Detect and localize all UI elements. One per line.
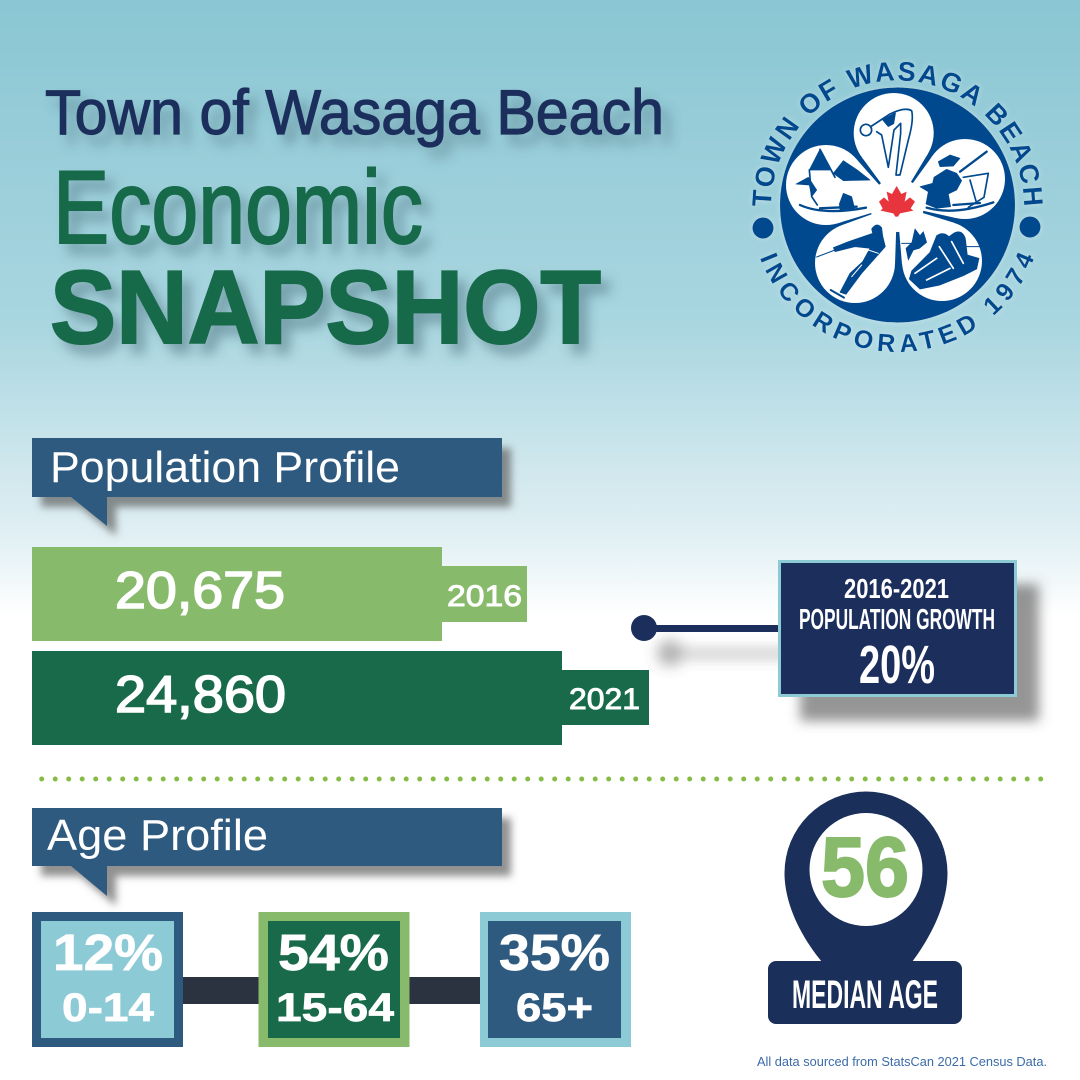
title <box>45 78 664 366</box>
value 2016: 20,675 <box>115 562 285 620</box>
median age plate <box>768 961 962 1024</box>
seal disc <box>780 88 1015 322</box>
header banner <box>32 438 502 526</box>
label 0-14: 0-14 <box>62 986 155 1030</box>
label 15-64: 15-64 <box>276 986 395 1030</box>
maple leaf <box>879 186 915 217</box>
value 2021: 24,860 <box>115 666 286 724</box>
white petals <box>786 93 1005 303</box>
header banner <box>32 808 502 896</box>
median age value: 56 <box>821 820 909 914</box>
12 percent: 12% <box>53 924 163 981</box>
illustration: windsurfer <box>796 149 870 210</box>
header text: Population Profile <box>50 443 400 492</box>
illustrations lower petals <box>800 202 993 298</box>
connector: bar to growth callout <box>631 615 780 641</box>
label 65+: 65+ <box>516 986 593 1030</box>
35 percent: 35% <box>499 924 610 981</box>
seal text bottom: INCORPORATED 1974 <box>760 252 1034 352</box>
panel: population profile header <box>32 438 502 526</box>
illustration: voyageur <box>920 152 988 208</box>
illustration: water skier <box>817 225 885 298</box>
bar: 2016 population <box>32 547 527 641</box>
callout value: 20% <box>859 635 935 695</box>
callout years: 2016-2021 <box>844 573 949 604</box>
age connectors <box>183 977 481 1004</box>
icon: median age pin <box>768 792 962 1024</box>
54 percent: 54% <box>278 924 389 981</box>
callout box <box>780 562 1016 696</box>
bar: 2021 population <box>32 651 649 745</box>
year 2021: 2021 <box>569 683 640 716</box>
bar body 2016 <box>32 547 442 641</box>
pin hole <box>810 813 922 926</box>
title line: SNAPSHOT: SNAPSHOT <box>50 250 601 366</box>
title line: town name: Town of Wasaga Beach <box>45 78 664 148</box>
title line: Economic: Economic <box>53 150 423 266</box>
pin body <box>784 792 948 962</box>
footnote source: All data sourced from StatsCan 2021 Census Data. <box>757 1054 1047 1069</box>
bar tab 2016 <box>440 566 527 622</box>
bar tab 2021 <box>560 670 649 725</box>
year 2016: 2016 <box>447 580 522 613</box>
dotted divider <box>42 776 1042 782</box>
seal text top: TOWN OF WASAGA BEACH <box>751 60 1043 206</box>
median age label: MEDIAN AGE <box>792 973 938 1017</box>
illustration: board and boat wakes <box>800 202 993 211</box>
callout: population growth <box>780 562 1016 696</box>
bar body 2021 <box>32 651 562 745</box>
age box: 15-64 <box>258 912 410 1047</box>
illustrations upper petals <box>796 109 988 210</box>
illustration: diver <box>860 109 912 175</box>
illustration: snowmobile riders <box>902 229 980 289</box>
panel: age profile header <box>32 808 502 896</box>
seal dots <box>752 216 1040 238</box>
logo: town seal <box>751 60 1043 352</box>
age box: 0-14 <box>32 912 183 1047</box>
age box: 65+ <box>480 912 631 1047</box>
header text: Age Profile <box>47 811 268 860</box>
